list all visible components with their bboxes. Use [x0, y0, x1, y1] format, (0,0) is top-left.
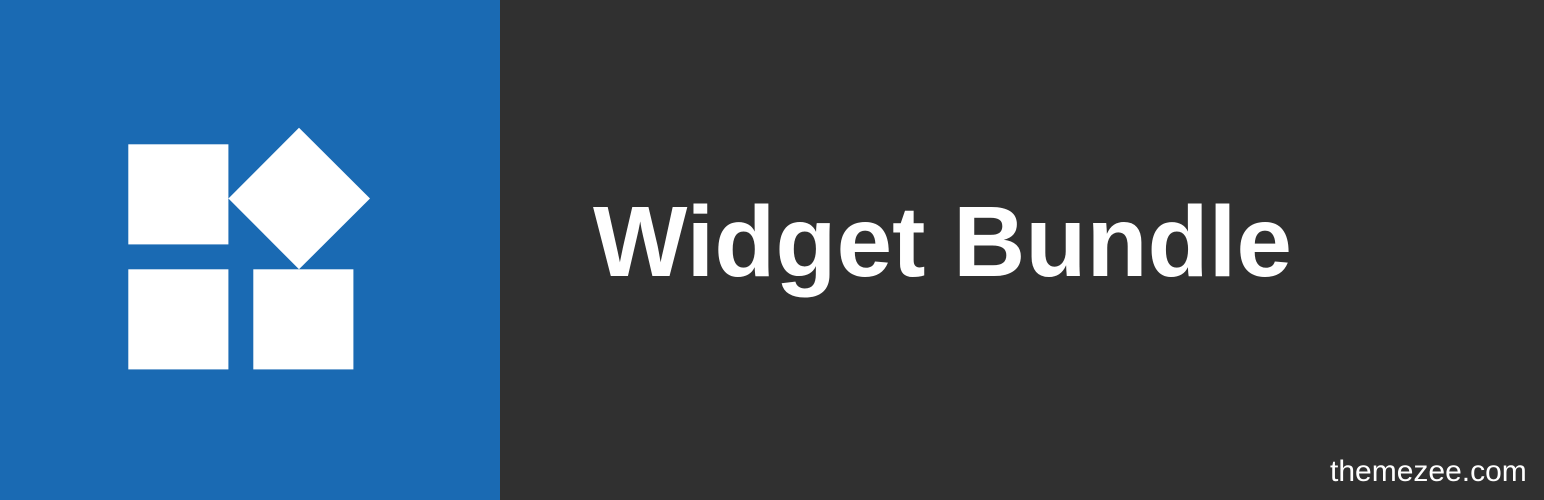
panel: blue icon panel: [0, 0, 500, 500]
title: Widget Bundle: [593, 186, 1292, 298]
icon: widget squares: [128, 128, 370, 370]
website label: themezee.com: [1330, 455, 1527, 488]
